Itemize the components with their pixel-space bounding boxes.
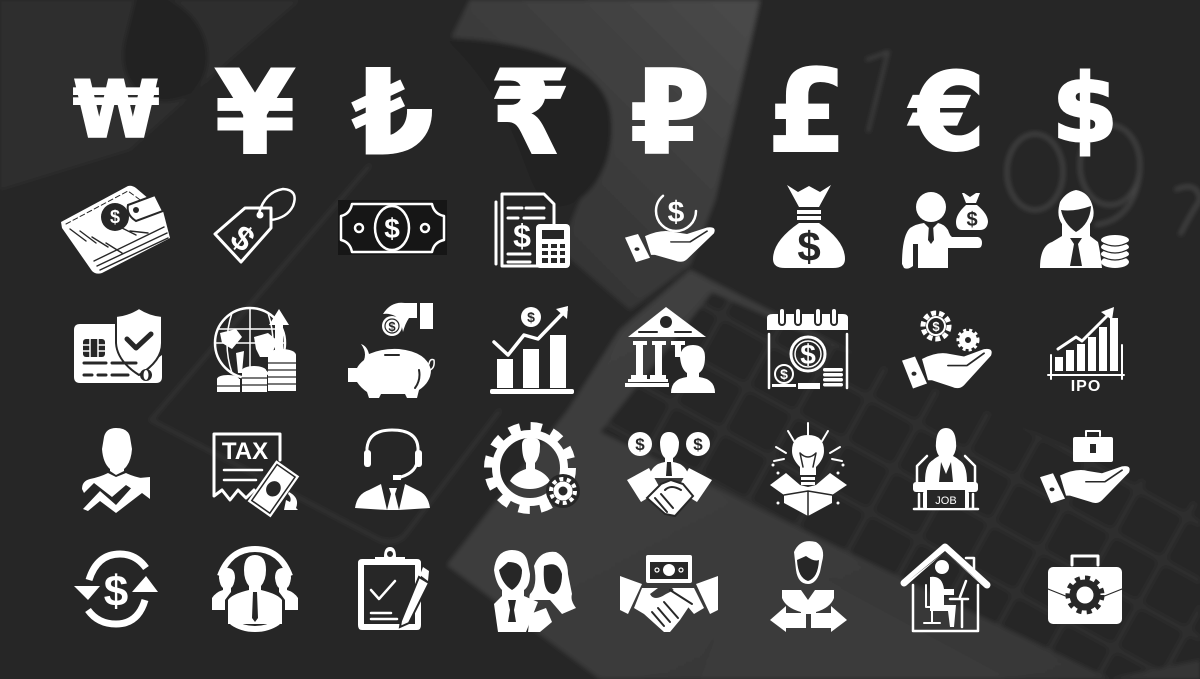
icon: hand with gears — [902, 313, 992, 388]
icon: secure credit card — [74, 308, 162, 383]
icon: IPO growth chart — [1048, 307, 1124, 395]
icon: hand with briefcase — [1040, 431, 1130, 503]
icon: money bag: $ — [797, 223, 821, 270]
rupee sign: ₹ — [490, 46, 570, 181]
icon: customer support agent — [355, 430, 430, 510]
icon: job recruiter at podium — [913, 428, 978, 509]
icon: calendar with coins — [767, 308, 848, 389]
dollar sign: $ — [1052, 55, 1118, 164]
icon: dollar exchange cycle: $ — [104, 567, 128, 616]
icon: businessman with money bag — [902, 192, 988, 269]
icon: growth bar chart — [490, 306, 574, 394]
icon: calendar with coins: $ — [800, 339, 816, 370]
row of currency symbols — [73, 45, 1118, 181]
icon: businessman with coin stack — [1040, 190, 1129, 268]
icon: calendar with coins: $ — [780, 366, 788, 382]
icon: handshake with coins: $ — [693, 435, 703, 454]
icon: clipboard checklist — [358, 547, 429, 630]
icon: hand holding coin — [625, 191, 715, 262]
icon: money bag — [773, 185, 845, 270]
icon: handshake with banknote — [620, 555, 718, 632]
icon: piggy bank with coin — [348, 303, 434, 398]
icon: banknote: $ — [384, 213, 400, 244]
icon: hand holding coin: $ — [668, 196, 685, 229]
icon: team of business people — [212, 549, 298, 629]
yen sign: ¥ — [215, 46, 295, 181]
icon: price tag: $ — [223, 218, 262, 260]
icon: invoice and calculator — [496, 194, 570, 268]
icon: handshake with coins — [627, 432, 712, 516]
icon: job recruiter at podium: JOB — [935, 495, 957, 507]
icon: banknote — [338, 200, 447, 255]
ruble sign: ₽ — [630, 46, 710, 181]
icon: bank with person — [625, 307, 715, 393]
won sign: ₩ — [73, 66, 159, 156]
icon: handshake with coins: $ — [635, 435, 645, 454]
icon: wallet: $ — [110, 207, 120, 227]
icon: IPO growth chart: IPO — [1071, 378, 1101, 395]
icon: price tag — [215, 189, 295, 262]
icon: invoice and calculator: $ — [513, 218, 531, 254]
icon: hand with gears: $ — [932, 319, 940, 334]
icon: growth bar chart: $ — [527, 309, 535, 325]
icon: man with split arrows — [770, 541, 847, 632]
icon: global investment — [215, 308, 296, 392]
icon: working from home — [904, 547, 987, 631]
icon: employee with growth arrow — [82, 428, 150, 513]
icon: tax bill: TAX — [222, 438, 268, 465]
icon: briefcase with gear — [1048, 556, 1122, 624]
pound sign: £ — [767, 45, 847, 178]
icon: idea box with light bulb — [770, 423, 847, 516]
icon: dollar exchange cycle — [74, 554, 158, 624]
icon: person in gear — [489, 427, 580, 509]
icon: wallet — [61, 186, 170, 274]
lira sign: ₺ — [353, 46, 433, 181]
icon: businessman with money bag: $ — [966, 209, 978, 231]
euro sign: € — [908, 51, 985, 174]
icon: piggy bank with coin: $ — [388, 319, 396, 334]
icon: man and woman profiles — [494, 550, 576, 632]
icon: tax bill — [214, 434, 299, 517]
